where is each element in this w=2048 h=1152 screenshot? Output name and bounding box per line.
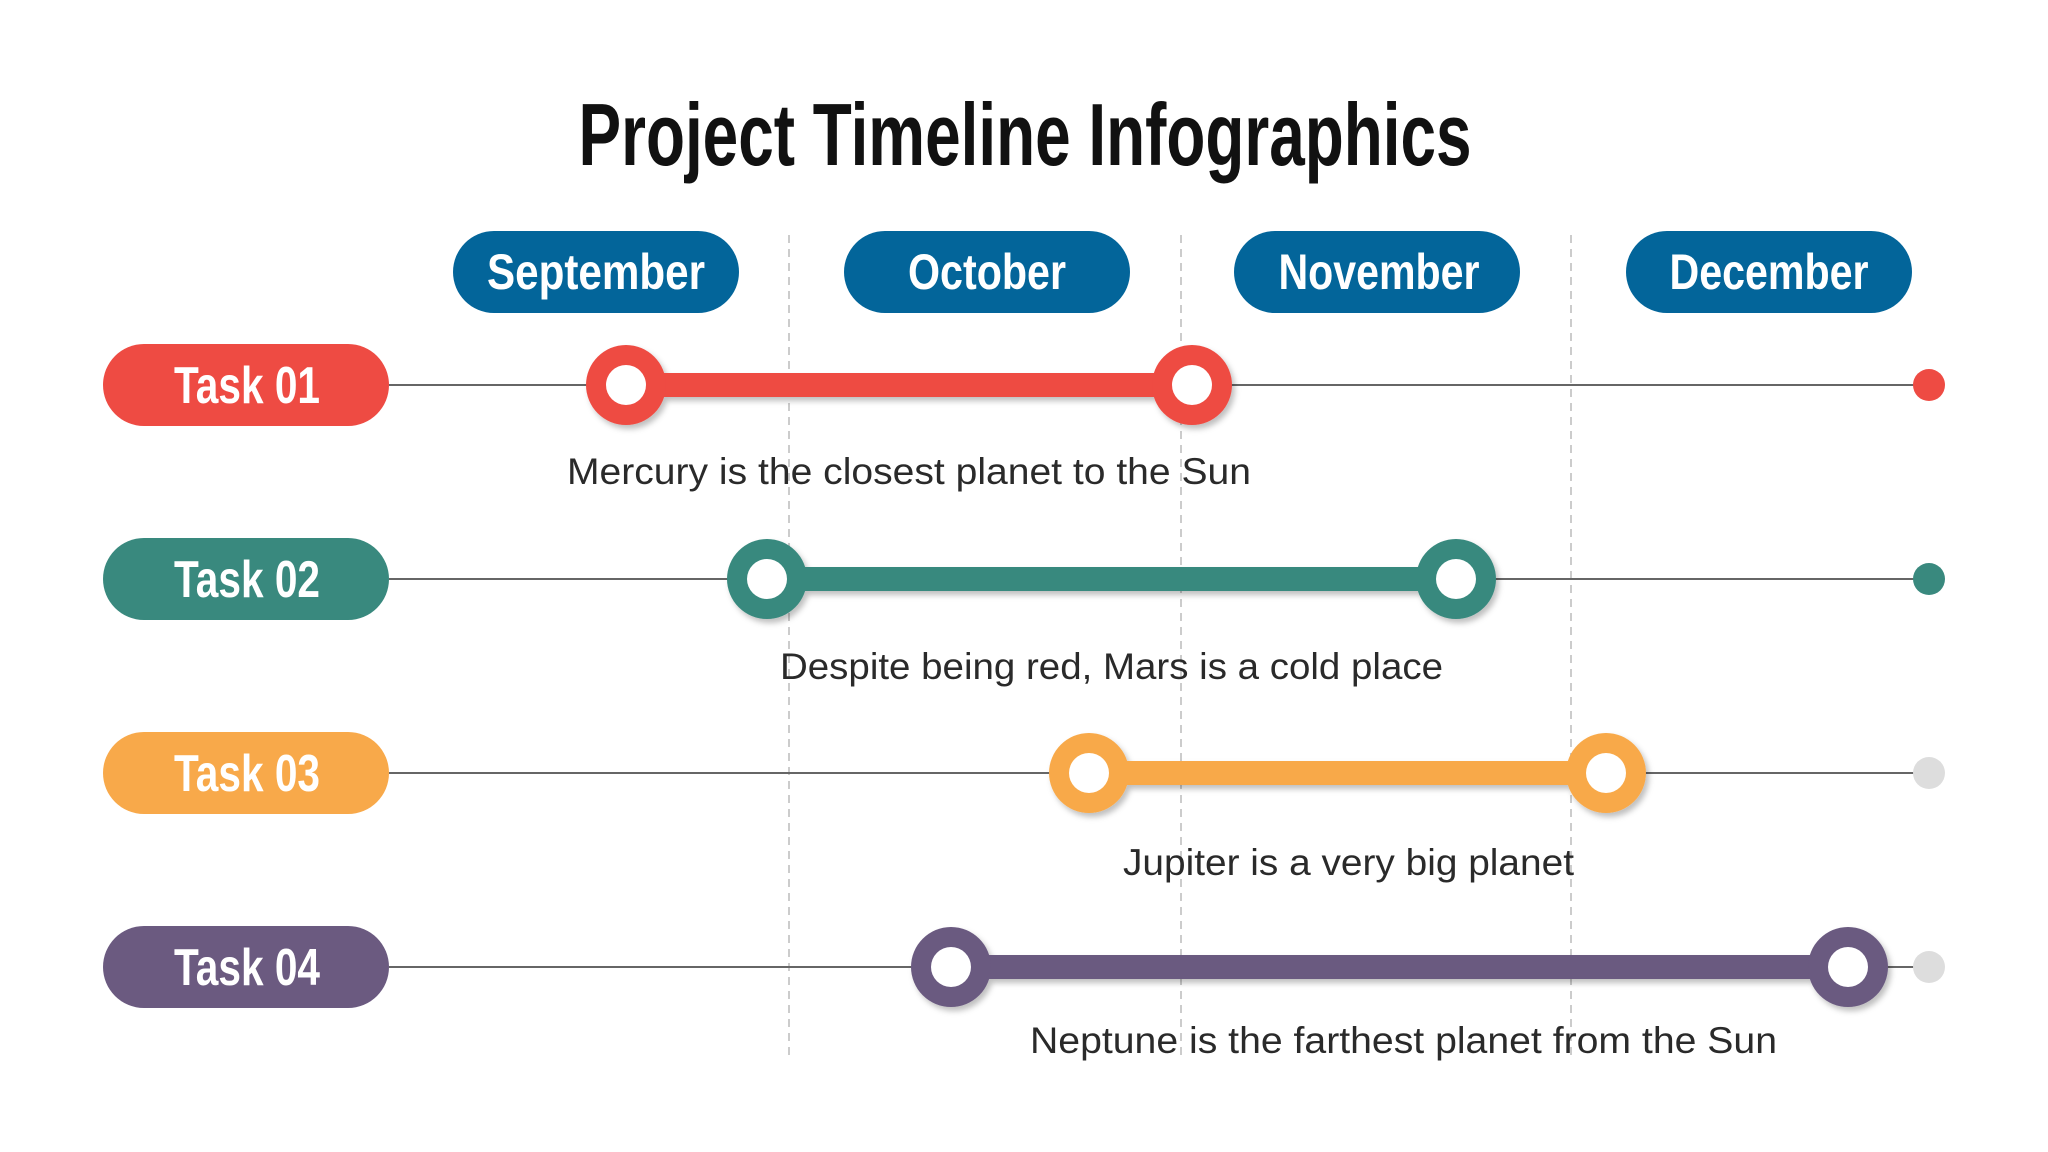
title: Project Timeline Infographics xyxy=(578,85,1472,184)
month: October xyxy=(844,231,1130,313)
description: Task 01: Mercury is the closest planet to the Sun xyxy=(567,451,1251,492)
label: Task 01: Task 01 xyxy=(174,357,320,415)
label: Task 01 xyxy=(103,344,389,426)
month: October: October xyxy=(908,244,1066,300)
bar: Task 02 xyxy=(727,539,1496,619)
month: September xyxy=(453,231,739,313)
month: September: September xyxy=(487,244,705,300)
month: November xyxy=(1234,231,1520,313)
month: November: November xyxy=(1278,244,1480,300)
label: Task 02: Task 02 xyxy=(174,551,320,609)
label: Task 03: Task 03 xyxy=(174,745,320,803)
row: Task 01 xyxy=(103,344,1945,492)
bar: Task 03 xyxy=(1049,733,1646,813)
row: Task 03 xyxy=(103,732,1945,883)
bar: Task 01 xyxy=(586,345,1232,425)
label: Task 04 xyxy=(103,926,389,1008)
description: Task 03: Jupiter is a very big planet xyxy=(1123,842,1575,883)
description: Task 04: Neptune is the farthest planet from the Sun xyxy=(1030,1020,1777,1061)
label: Task 03 xyxy=(103,732,389,814)
row: Task 02 xyxy=(103,538,1945,687)
month: December xyxy=(1626,231,1912,313)
bar: Task 04 xyxy=(911,927,1888,1007)
month: December: December xyxy=(1670,244,1868,300)
label: Task 04: Task 04 xyxy=(174,939,320,997)
month headers xyxy=(453,231,1912,313)
label: Task 02 xyxy=(103,538,389,620)
description: Task 02: Despite being red, Mars is a cold place xyxy=(780,646,1443,687)
row: Task 04 xyxy=(103,926,1945,1061)
